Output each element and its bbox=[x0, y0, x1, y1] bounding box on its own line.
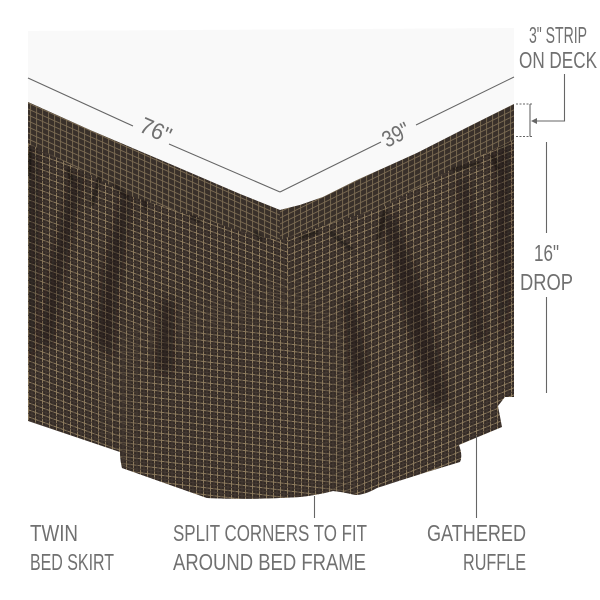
label: 16 inch drop with line: DROP bbox=[520, 269, 573, 295]
label: split corners with leader bbox=[173, 496, 367, 575]
label: 16 inch drop with line bbox=[520, 142, 573, 393]
strip bracket and arrow bbox=[516, 74, 564, 136]
dimension line: 76 inch: 76" bbox=[136, 112, 176, 149]
label: 3 inch strip on deck bbox=[519, 22, 597, 73]
fabric fold shadows bbox=[28, 140, 510, 410]
label: twin bed skirt bbox=[30, 520, 114, 575]
label: split corners with leader: AROUND BED FRAME bbox=[173, 549, 366, 575]
drop panel: center bottom bbox=[96, 272, 367, 499]
gather creases bbox=[29, 148, 498, 250]
dimension line: 39 inch: 39" bbox=[377, 117, 414, 152]
deck strip: left bbox=[28, 102, 280, 240]
label: twin bed skirt: TWIN bbox=[30, 520, 78, 546]
bed skirt fabric bbox=[20, 95, 518, 510]
drop panel: left side bbox=[20, 95, 288, 505]
label: gathered ruffle with leader: RUFFLE bbox=[463, 549, 526, 575]
label: gathered ruffle with leader bbox=[427, 436, 526, 575]
drop panel: right side bbox=[288, 95, 518, 505]
deck strip: right bbox=[280, 104, 514, 240]
bed deck panel bbox=[28, 28, 514, 210]
dimension line: 76 inch bbox=[28, 78, 280, 192]
label: twin bed skirt: BED SKIRT bbox=[30, 549, 114, 575]
label: 16 inch drop with line: 16" bbox=[534, 240, 559, 266]
label: gathered ruffle with leader: GATHERED bbox=[427, 520, 526, 546]
label: split corners with leader: SPLIT CORNERS TO FIT bbox=[173, 520, 367, 546]
dimension line: 39 inch bbox=[280, 77, 514, 192]
